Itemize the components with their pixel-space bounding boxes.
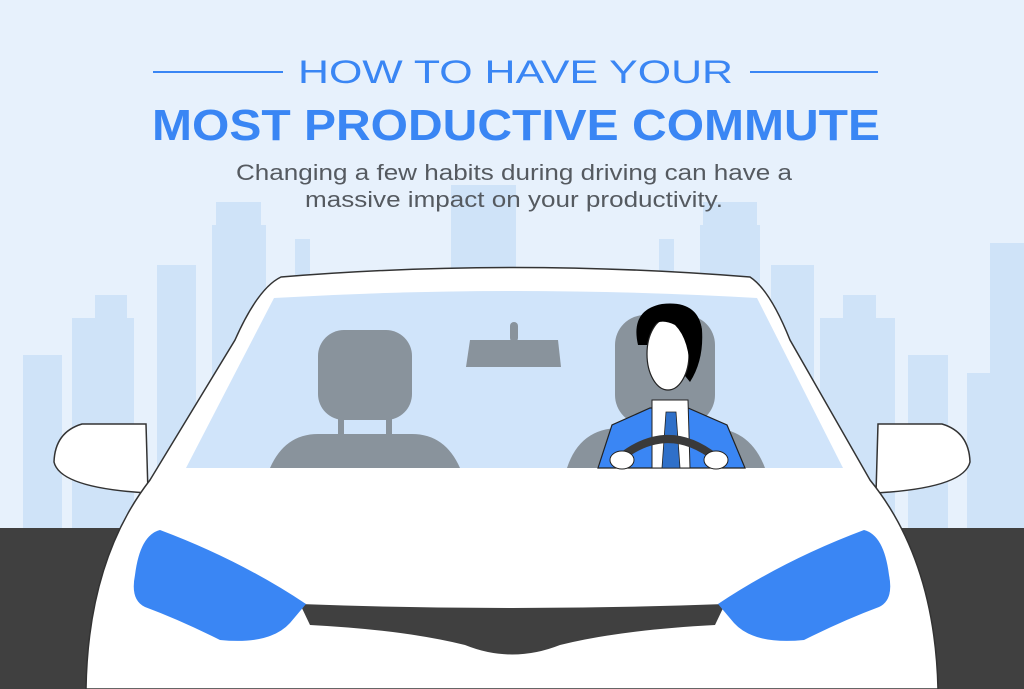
grille xyxy=(300,604,725,654)
skyline xyxy=(23,185,1024,530)
rear view mirror xyxy=(466,322,561,367)
car xyxy=(54,268,970,689)
headlight right xyxy=(718,530,890,641)
subtitle: massive impact on your productivity. xyxy=(305,187,723,212)
driver xyxy=(567,304,765,469)
title: HOW TO HAVE YOUR xyxy=(298,54,733,90)
mirror left xyxy=(54,424,148,493)
body xyxy=(86,268,938,689)
subtitle: Changing a few habits during driving can have a xyxy=(236,160,793,185)
title xyxy=(152,54,880,150)
road xyxy=(0,528,1024,689)
headlight left xyxy=(134,530,306,641)
mirror right xyxy=(876,424,970,493)
title: MOST PRODUCTIVE COMMUTE xyxy=(152,101,880,150)
passenger seat xyxy=(270,330,460,468)
windshield xyxy=(186,291,843,468)
subtitle xyxy=(236,160,793,212)
